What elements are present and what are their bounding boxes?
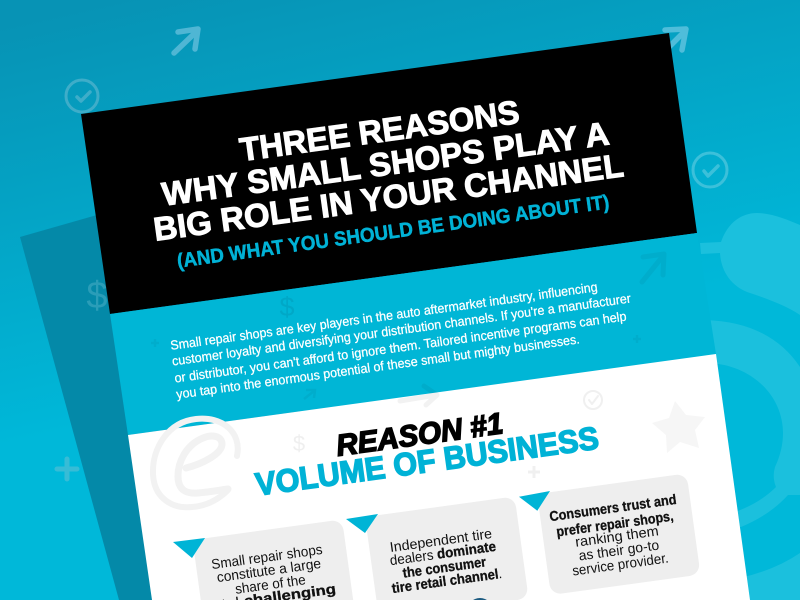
- icon: grey dollar: $: [293, 431, 305, 456]
- card 2: Independent tire: [389, 525, 493, 555]
- card 2: [346, 496, 529, 600]
- page: blue intro panel: [110, 233, 716, 435]
- card 2: tire retail channel.: [391, 565, 503, 596]
- intro paragraph: or distributor, you can't afford to ignore them. Tailored incentive programs can help: [173, 309, 627, 386]
- card 3: Consumers trust and: [548, 491, 677, 524]
- title: WHY SMALL SHOPS PLAY A: [160, 115, 611, 213]
- page: white content panel: [128, 354, 750, 600]
- card 3: as their go-to: [578, 537, 660, 563]
- card 1: Small repair shops: [210, 541, 323, 572]
- subtitle: (AND WHAT YOU SHOULD BE DOING ABOUT IT): [176, 191, 611, 273]
- card 1: [173, 519, 356, 600]
- icon: large light wrench shape: [700, 213, 800, 600]
- icon: arrow top right: [662, 29, 686, 54]
- icon: grey check circle: [584, 391, 602, 409]
- shadow sheet behind the page: [20, 215, 300, 600]
- card 3: service provider.: [571, 550, 669, 579]
- card 3: prefer repair shops,: [555, 508, 674, 540]
- icon: grey plus: [528, 466, 540, 478]
- title: THREE REASONS: [237, 93, 522, 168]
- icon: faint small arrow in blue panel: [304, 390, 315, 399]
- reason heading: REASON #1: [334, 407, 505, 463]
- icon: e logo watermark: [153, 419, 238, 507]
- card 2: the consumer: [402, 553, 488, 581]
- title: BIG ROLE IN YOUR CHANNEL: [151, 146, 626, 248]
- icon: check circle right: [693, 153, 727, 187]
- icon: faint plus left in blue panel: [151, 339, 159, 347]
- intro paragraph: [169, 279, 632, 402]
- icon: dollar sign on shadow sheet: $: [86, 275, 108, 317]
- card 3: ranking them: [574, 522, 660, 550]
- intro paragraph: Small repair shops are key players in the auto aftermarket industry, influencing: [169, 279, 598, 353]
- icon: dark circle at card 2 base: [467, 598, 493, 600]
- intro paragraph: you tap into the enormous potential of these small but mighty businesses.: [175, 331, 581, 402]
- icon: check circle left: [66, 80, 98, 112]
- card 3: [519, 473, 701, 595]
- icon: grey star: [652, 401, 705, 453]
- page: black title panel: [81, 33, 697, 314]
- icon: arrow top left: [174, 29, 198, 53]
- icon: faint plus right in blue panel: [633, 335, 641, 343]
- card 1: share of the: [234, 571, 307, 597]
- icon: plus sign: [57, 459, 77, 479]
- icon: grey right arrow: [400, 386, 437, 405]
- icon: faint arrow in blue panel: [642, 254, 664, 282]
- icon: faint dollar in blue panel: $: [279, 292, 295, 322]
- title: [151, 93, 626, 248]
- card 2: dealers dominate: [389, 538, 497, 568]
- card 1: constitute a large: [216, 555, 322, 585]
- reason subheading: VOLUME OF BUSINESS: [253, 420, 601, 503]
- intro paragraph: customer loyalty and diversifying your distribution channels. If you're a manufacturer: [171, 290, 632, 369]
